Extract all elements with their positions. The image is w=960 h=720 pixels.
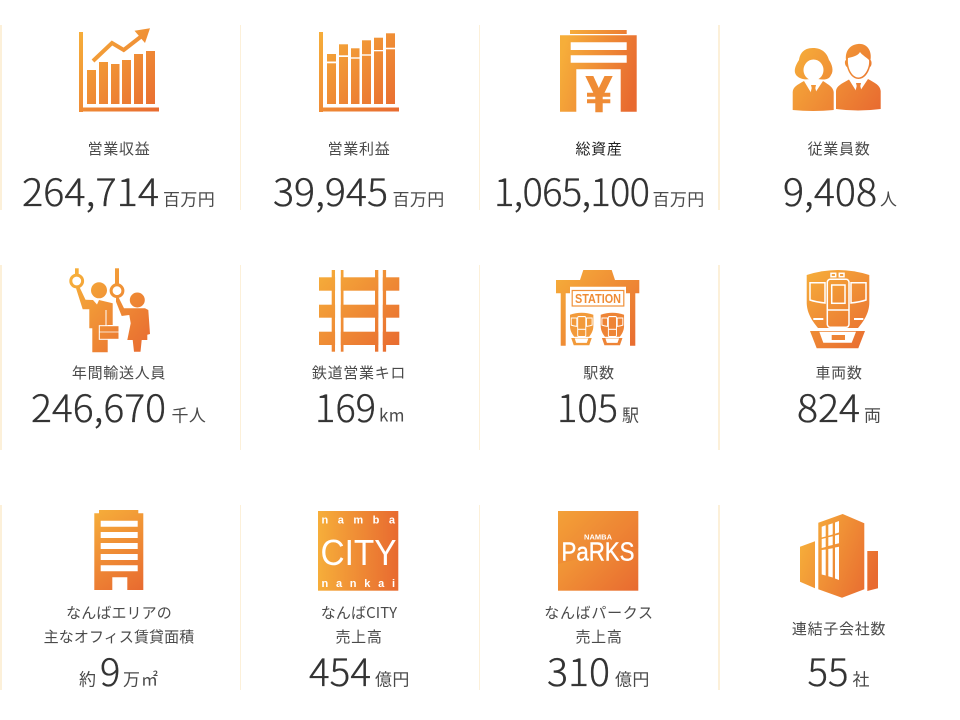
panel: 駅数 xyxy=(556,270,639,433)
value: 9 xyxy=(100,642,120,697)
icon: station with two trains: STATION xyxy=(575,292,621,306)
icon: commuters holding straps xyxy=(71,268,150,352)
label xyxy=(44,602,194,647)
label: 車両数 xyxy=(815,362,863,383)
label: 営業収益 xyxy=(88,138,150,159)
icon: NAMBA PARKS logo: PaRKS xyxy=(562,536,634,566)
panel: 連結子会社数 xyxy=(792,514,886,697)
icon: namba CITY logo: CITY xyxy=(320,532,396,573)
value: 1,065,100 xyxy=(494,162,650,217)
value: 55 xyxy=(808,642,848,697)
label: 総資産 xyxy=(575,138,623,159)
value xyxy=(79,642,158,697)
value: 824 xyxy=(797,378,860,433)
icon: train front xyxy=(807,270,869,348)
panel: 鉄道営業キロ xyxy=(312,270,406,433)
label: 売上高 xyxy=(575,626,623,647)
label: 鉄道営業キロ xyxy=(312,362,406,383)
panel: 営業利益 xyxy=(273,32,445,217)
value: 両 xyxy=(864,402,881,426)
label: なんばパークス xyxy=(544,602,654,623)
label: 連結子会社数 xyxy=(792,618,886,639)
panel: 総資産 xyxy=(494,30,705,217)
value: 310 xyxy=(547,642,610,697)
icon: railway track xyxy=(319,270,399,352)
value: ㎡ xyxy=(141,666,158,690)
value: 9,408 xyxy=(783,162,877,217)
value: 39,945 xyxy=(273,162,388,217)
label: 駅数 xyxy=(583,362,615,383)
label xyxy=(544,602,654,647)
label: なんばCITY xyxy=(321,602,397,623)
panel: なんばパークス売上高 xyxy=(544,511,654,697)
value: 億円 xyxy=(375,666,410,690)
panel: 車両数 xyxy=(797,270,881,433)
panel: 営業収益 xyxy=(22,28,215,217)
icon: namba CITY logo: namba xyxy=(322,514,396,526)
label xyxy=(321,602,397,647)
value: 社 xyxy=(852,666,870,690)
icon: right small train xyxy=(601,313,624,345)
icon: group of buildings xyxy=(800,514,878,598)
icon: rising bar chart with arrow xyxy=(79,28,159,112)
value: 万 xyxy=(123,666,140,690)
value xyxy=(315,378,405,433)
label: なんばエリアの xyxy=(66,602,172,623)
value: 駅 xyxy=(622,402,639,426)
value: 千人 xyxy=(172,402,206,426)
value xyxy=(808,642,870,697)
icon: building with yen sign xyxy=(560,30,637,112)
value xyxy=(547,642,650,697)
icon: office building xyxy=(94,510,143,590)
icon: NAMBA PARKS logo xyxy=(558,511,638,591)
icon: left small train xyxy=(570,313,593,345)
icon: namba CITY logo xyxy=(318,511,398,591)
icon: namba CITY logo: nankai xyxy=(322,578,395,590)
value: 105 xyxy=(557,378,618,433)
value: 246,670 xyxy=(31,378,166,433)
value: 百万円 xyxy=(392,186,445,210)
value: km xyxy=(379,402,405,426)
value: 約 xyxy=(79,666,96,690)
value: 169 xyxy=(315,378,376,433)
panel: 年間輸送人員 xyxy=(31,268,206,433)
icon: NAMBA PARKS logo: NAMBA xyxy=(584,532,613,542)
value xyxy=(273,162,445,217)
label: 主なオフィス賃貸面積 xyxy=(44,626,194,647)
value: 454 xyxy=(309,642,371,697)
value: 億円 xyxy=(615,666,650,690)
value xyxy=(309,642,410,697)
value xyxy=(22,162,215,217)
value: 人 xyxy=(880,186,897,210)
panel: なんばCITY売上高 xyxy=(309,511,410,697)
label: 営業利益 xyxy=(328,138,390,159)
panel: なんばエリアの主なオフィス賃貸面積 xyxy=(44,510,194,697)
icon: two employees xyxy=(793,44,881,111)
icon: stacked bar chart xyxy=(319,32,399,112)
label: 従業員数 xyxy=(808,138,870,159)
value: 百万円 xyxy=(163,186,215,210)
value: 264,714 xyxy=(22,162,159,217)
value: 百万円 xyxy=(652,186,705,210)
label: 年間輸送人員 xyxy=(72,362,166,383)
icon: station with two trains xyxy=(556,270,639,346)
label: 売上高 xyxy=(335,626,383,647)
panel: 従業員数 xyxy=(783,44,897,217)
